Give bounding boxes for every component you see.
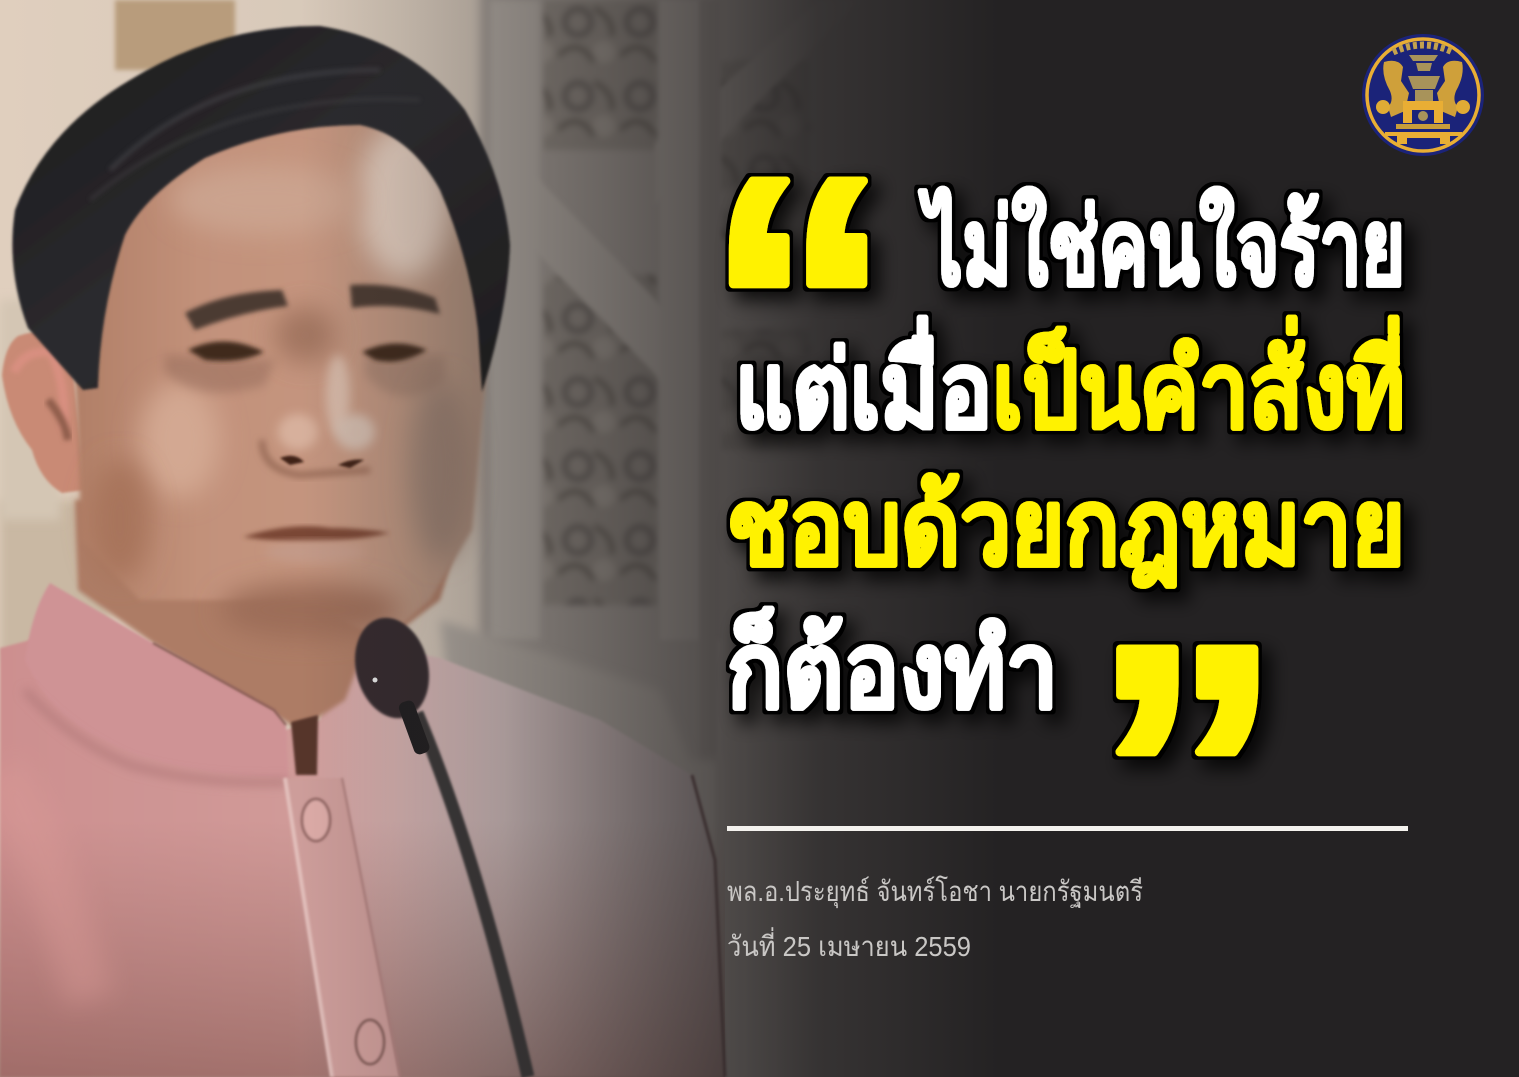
- neck: [75, 500, 470, 730]
- hair: [12, 26, 510, 392]
- dark gradient overlay: [300, 0, 1000, 1077]
- eyes: [188, 341, 264, 361]
- line 2: แต่เมื่อเป็นคำสั่งที่: [735, 316, 1405, 450]
- eye bags: [165, 355, 275, 393]
- eyebrows: [185, 290, 288, 330]
- nose: [326, 355, 350, 435]
- attribution: [727, 875, 1143, 962]
- microphone: [345, 610, 528, 1077]
- shirt: [0, 600, 725, 1077]
- closing quote mark: ”: [1092, 570, 1282, 977]
- face: [75, 115, 490, 640]
- date: วันที่ 25 เมษายน 2559: [727, 927, 971, 962]
- photo: speaker: [0, 26, 725, 1077]
- opening quote mark: “: [706, 101, 891, 509]
- collar: [25, 583, 288, 778]
- line 3: ชอบด้วยกฎหมาย: [727, 469, 1405, 588]
- divider rule: [727, 826, 1408, 831]
- line 4: ก็ต้องทำ: [727, 607, 1058, 730]
- mouth: [243, 526, 390, 542]
- ear: [2, 331, 85, 493]
- placket and buttons: [285, 778, 400, 1077]
- neck opening: [291, 715, 318, 775]
- quote block: [706, 101, 1405, 977]
- icon: government seal: [1362, 34, 1484, 156]
- speaker name: พล.อ.ประยุทธ์ จันทร์โอชา นายกรัฐมนตรี: [727, 875, 1143, 909]
